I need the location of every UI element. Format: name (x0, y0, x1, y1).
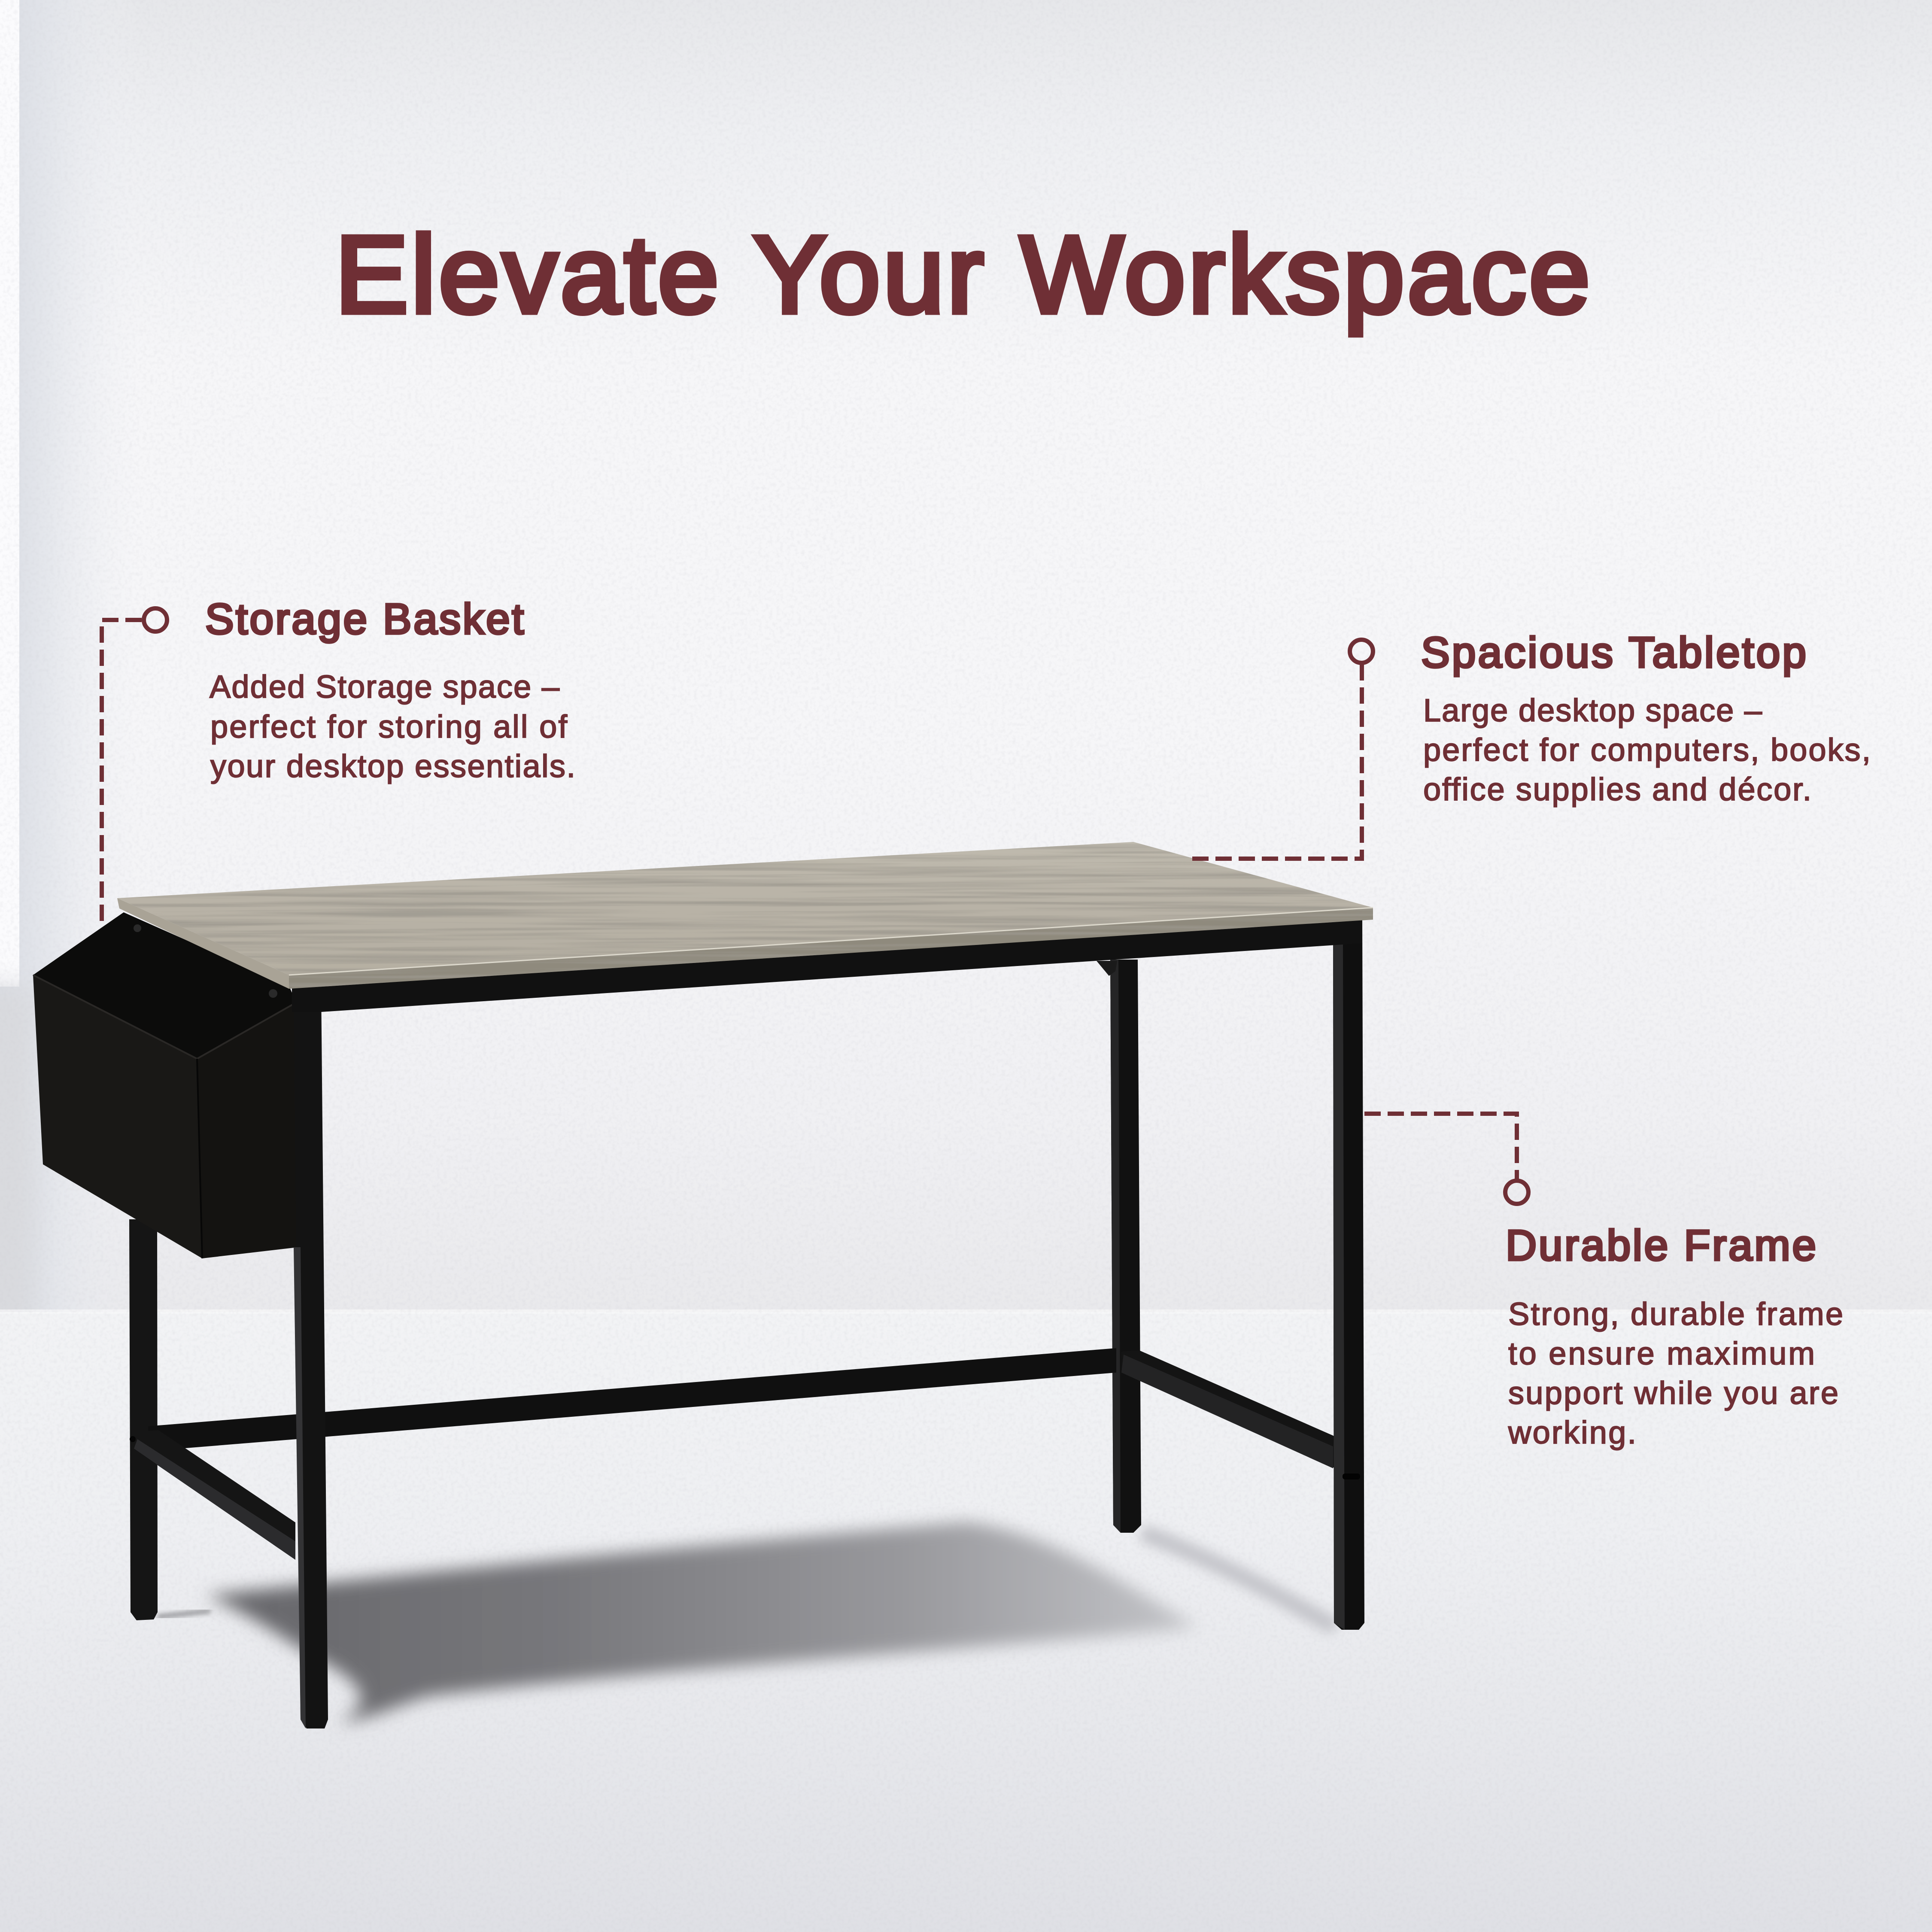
text block: spacious tabletop (1423, 693, 1871, 807)
left side stretcher (130, 1430, 295, 1560)
front rail (292, 918, 1362, 1012)
heading: storage basket: Storage Basket (205, 595, 524, 643)
desk (33, 837, 1378, 1728)
text block: durable frame: working. (1508, 1415, 1636, 1450)
connector: storage basket (102, 608, 167, 923)
heading: spacious tabletop: Spacious Tabletop (1421, 629, 1806, 677)
text block: storage basket: Added Storage space – (210, 669, 560, 705)
back left leg (129, 1219, 158, 1620)
heading: durable frame: Durable Frame (1506, 1221, 1816, 1270)
corner bracket (1097, 961, 1117, 976)
connector: durable frame (1364, 1114, 1528, 1204)
text block: storage basket: your desktop essentials. (210, 748, 575, 784)
back stretcher bar (148, 1348, 1116, 1451)
connector: spacious tabletop (1191, 640, 1373, 859)
text block: storage basket (210, 669, 575, 784)
callout: durable frame (1506, 1221, 1843, 1450)
desk floor shadow (157, 1522, 1335, 1723)
back right leg (1110, 960, 1141, 1533)
text block: durable frame: support while you are (1508, 1375, 1838, 1411)
front right leg (1333, 919, 1364, 1630)
text block: spacious tabletop: office supplies and décor. (1423, 772, 1811, 807)
storage basket (33, 912, 298, 1258)
right side stretcher (1121, 1350, 1335, 1468)
front left leg (294, 987, 328, 1728)
text block: durable frame: Strong, durable frame (1508, 1296, 1843, 1332)
text block: spacious tabletop: perfect for computers, books, (1423, 732, 1871, 768)
tabletop (107, 837, 1378, 992)
callout: spacious tabletop (1421, 629, 1871, 807)
text block: spacious tabletop: Large desktop space – (1423, 693, 1762, 728)
title: Elevate Your Workspace (335, 213, 1590, 335)
text block: durable frame: to ensure maximum (1508, 1336, 1815, 1371)
text block: storage basket: perfect for storing all of (210, 709, 567, 744)
text block: durable frame (1508, 1296, 1843, 1450)
callout: storage basket (205, 595, 575, 784)
